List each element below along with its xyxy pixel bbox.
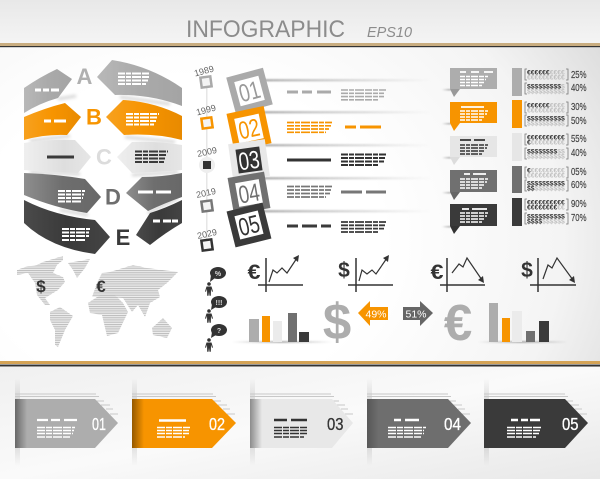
line chart: dollar down: $ — [521, 259, 533, 282]
person with question bubble: ? — [217, 328, 221, 335]
row B — [24, 100, 182, 140]
gauge 70% — [527, 214, 565, 226]
row C: C — [96, 144, 112, 170]
row D — [24, 173, 182, 213]
year 1999: 1999 — [195, 103, 217, 117]
number tile 02: 02 — [236, 114, 262, 145]
line chart: dollar down — [521, 258, 576, 292]
gauge 40% second: $$$$$$$$$$ — [527, 148, 565, 156]
number tile 04: 04 — [236, 178, 262, 210]
line chart: dollar up — [338, 255, 393, 292]
number tile 04 — [228, 172, 270, 214]
checkbox 2029 — [201, 239, 213, 251]
percent labels: 70% — [571, 212, 586, 224]
number tile 03: 03 — [237, 146, 261, 176]
bar chart left — [232, 313, 332, 343]
arrow 51%: 51% — [405, 308, 427, 320]
arrow 49% — [358, 301, 388, 326]
panel: arrow 05: 05 — [562, 414, 578, 434]
row 4 text — [287, 186, 386, 197]
gauge 50% — [527, 116, 565, 128]
callout 1 — [442, 68, 497, 97]
timeline axis — [206, 80, 208, 250]
lower rule — [0, 361, 600, 366]
panel: arrow 03 — [250, 378, 353, 466]
ribbon shadows — [30, 96, 178, 215]
callout 4 — [442, 170, 497, 200]
percent labels: 50% — [571, 115, 586, 127]
year 1989: 1989 — [193, 64, 215, 78]
gauge 25% — [527, 70, 565, 82]
person with question bubble — [205, 324, 227, 352]
gauge 55% — [527, 134, 565, 146]
gauge 60%: $$$$$$$$$$ — [527, 180, 565, 188]
checkbox 1989 — [200, 76, 212, 88]
gauge 30% — [527, 102, 565, 114]
header band — [0, 0, 600, 43]
panel: arrow 05 — [484, 378, 588, 466]
line chart: euro down: € — [430, 261, 444, 284]
panel: arrow 02 — [132, 378, 236, 466]
gauge 40% — [527, 84, 565, 96]
row B: B — [86, 104, 102, 130]
row 3 text — [287, 154, 386, 165]
gauge 60%: $$$$$$$$$$ — [527, 186, 565, 192]
percent labels: 30% — [571, 101, 586, 113]
percent labels: 40% — [571, 82, 586, 94]
year 2019: 2019 — [195, 186, 217, 200]
checkbox 2009 — [199, 157, 215, 173]
gauge 30%: €€€€€€€€€€ — [527, 102, 565, 110]
checkbox 1999 — [201, 117, 213, 129]
gauge 55%: €€€€€€€€€€ — [527, 140, 565, 146]
panel: arrow 03: 03 — [327, 414, 344, 434]
person with percent bubble — [205, 267, 226, 296]
callout 5 — [442, 204, 497, 234]
gauge 70%: $$$$$$$$$$ — [527, 218, 565, 226]
big euro: € — [444, 294, 472, 351]
panel: arrow 04 — [367, 378, 471, 466]
header rule — [0, 43, 600, 47]
percent labels: 55% — [571, 133, 586, 145]
row E — [24, 200, 182, 254]
row A: A — [77, 64, 93, 89]
number tile 05 — [227, 203, 271, 247]
world map — [17, 256, 178, 347]
bar chart right — [478, 303, 568, 343]
number tile 05: 05 — [236, 210, 263, 242]
gauge 70%: $$$$$$$$$$ — [527, 214, 565, 220]
gauge 05%: €€€€€€€€€€ — [527, 172, 565, 180]
gauge 50%: $$$$$$$$$$ — [527, 120, 565, 128]
gauge brackets — [525, 69, 568, 224]
subtitle: EPS10 — [367, 24, 413, 41]
year 2009: 2009 — [196, 145, 218, 159]
percent labels: 60% — [571, 179, 586, 191]
gauge 60% — [527, 180, 565, 192]
gauge 50%: $$$$$$$$$$ — [527, 116, 565, 122]
euro marker: € — [96, 277, 106, 296]
line chart: euro up — [248, 255, 303, 292]
number tile 01: 01 — [236, 76, 264, 108]
number tile 01 — [226, 68, 273, 114]
row 5 text — [287, 222, 386, 232]
panel: A to E ribbon — [24, 60, 182, 254]
gauge 90%: €€€€€€€€€€ — [527, 204, 565, 212]
gauge 30%: €€€€€€€€€€ — [527, 108, 565, 114]
gauge 40%: $$$$$$$$$$ — [527, 84, 565, 90]
percent labels: 25% — [571, 69, 586, 81]
row D: D — [105, 184, 121, 210]
panel: arrow 02: 02 — [209, 414, 225, 434]
line chart: euro down — [430, 258, 485, 292]
year 2029: 2029 — [196, 227, 218, 241]
line chart: dollar up: $ — [338, 259, 350, 282]
row 2 text — [287, 122, 381, 132]
row E: E — [116, 225, 130, 250]
percent labels — [571, 69, 586, 224]
percent labels: 40% — [571, 147, 586, 159]
currency gauges — [525, 69, 568, 226]
gauge 55%: €€€€€€€€€€ — [527, 134, 565, 142]
checkbox 2019 — [201, 200, 213, 212]
callout 2 — [442, 102, 497, 131]
row 2 shadow — [264, 111, 432, 114]
arrow 49%: 49% — [365, 308, 387, 320]
row 1 text — [287, 90, 386, 100]
footer band — [0, 367, 600, 479]
gauge 25%: €€€€€€€€€€ — [527, 74, 565, 82]
timeline rows — [264, 79, 432, 232]
row 4 shadow — [264, 177, 432, 180]
callout 3 — [442, 136, 497, 165]
number tile 02 — [226, 106, 272, 151]
person with exclamation bubble: !!! — [216, 300, 222, 307]
person with exclamation bubble — [205, 296, 227, 323]
row A — [24, 60, 182, 113]
colour bars — [512, 68, 522, 226]
row 5 shadow — [264, 210, 432, 212]
panel: arrow 04: 04 — [444, 414, 461, 434]
big dollar: $ — [323, 293, 351, 350]
gauge 05%: €€€€€€€€€€ — [527, 168, 565, 174]
row 1 shadow — [264, 79, 432, 82]
percent labels: 90% — [571, 198, 586, 210]
gauge 90%: €€€€€€€€€€ — [527, 200, 565, 206]
title: INFOGRAPHIC — [186, 16, 345, 43]
panel: arrow 01: 01 — [92, 414, 106, 434]
gauge 90% — [527, 200, 565, 212]
gauge 40% second — [527, 148, 565, 160]
dollar marker: $ — [36, 277, 46, 296]
gauge 25%: €€€€€€€€€€ — [527, 70, 565, 76]
gauge 40%: $$$$$$$$$$ — [527, 88, 565, 96]
person with percent bubble: % — [215, 271, 222, 278]
line chart: euro up: € — [248, 261, 261, 284]
percent labels: 05% — [571, 166, 586, 178]
number tile 03 — [228, 139, 270, 181]
gauge 40% second: $$$$$$$$$$ — [527, 154, 565, 160]
panel: arrow 01 — [15, 378, 118, 466]
row 3 shadow — [264, 144, 432, 146]
row C — [24, 140, 182, 173]
gauge 05% — [527, 168, 565, 180]
arrow 51% — [403, 301, 433, 326]
